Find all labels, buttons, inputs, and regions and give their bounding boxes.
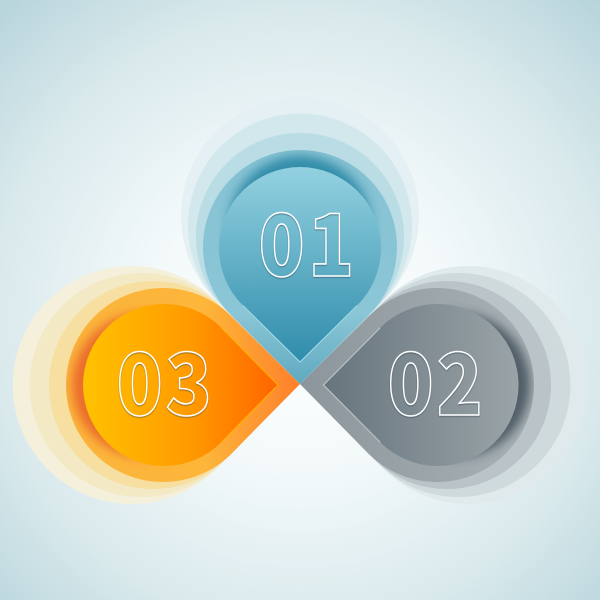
inner drop: blue (219, 167, 381, 362)
number 01: 01 (259, 179, 354, 301)
outer drop: orange (66, 288, 300, 482)
halo rings: blue (181, 97, 419, 341)
inner drop: gray (323, 304, 519, 466)
ring shadow: blue (221, 150, 379, 229)
outer drop: blue (203, 150, 397, 384)
inner drop: orange (83, 304, 278, 466)
panel: 01 blue drop (181, 97, 419, 384)
ring shadow: gray (459, 306, 534, 464)
panel: 02 gray drop (300, 266, 587, 504)
number 02: 02 (388, 318, 483, 440)
panel: 03 orange drop (13, 266, 300, 504)
number 03: 03 (117, 318, 212, 440)
halo rings: orange (13, 266, 257, 504)
halo rings: gray (343, 266, 587, 504)
outer drop: gray (300, 288, 534, 482)
ring shadow: orange (66, 308, 139, 462)
